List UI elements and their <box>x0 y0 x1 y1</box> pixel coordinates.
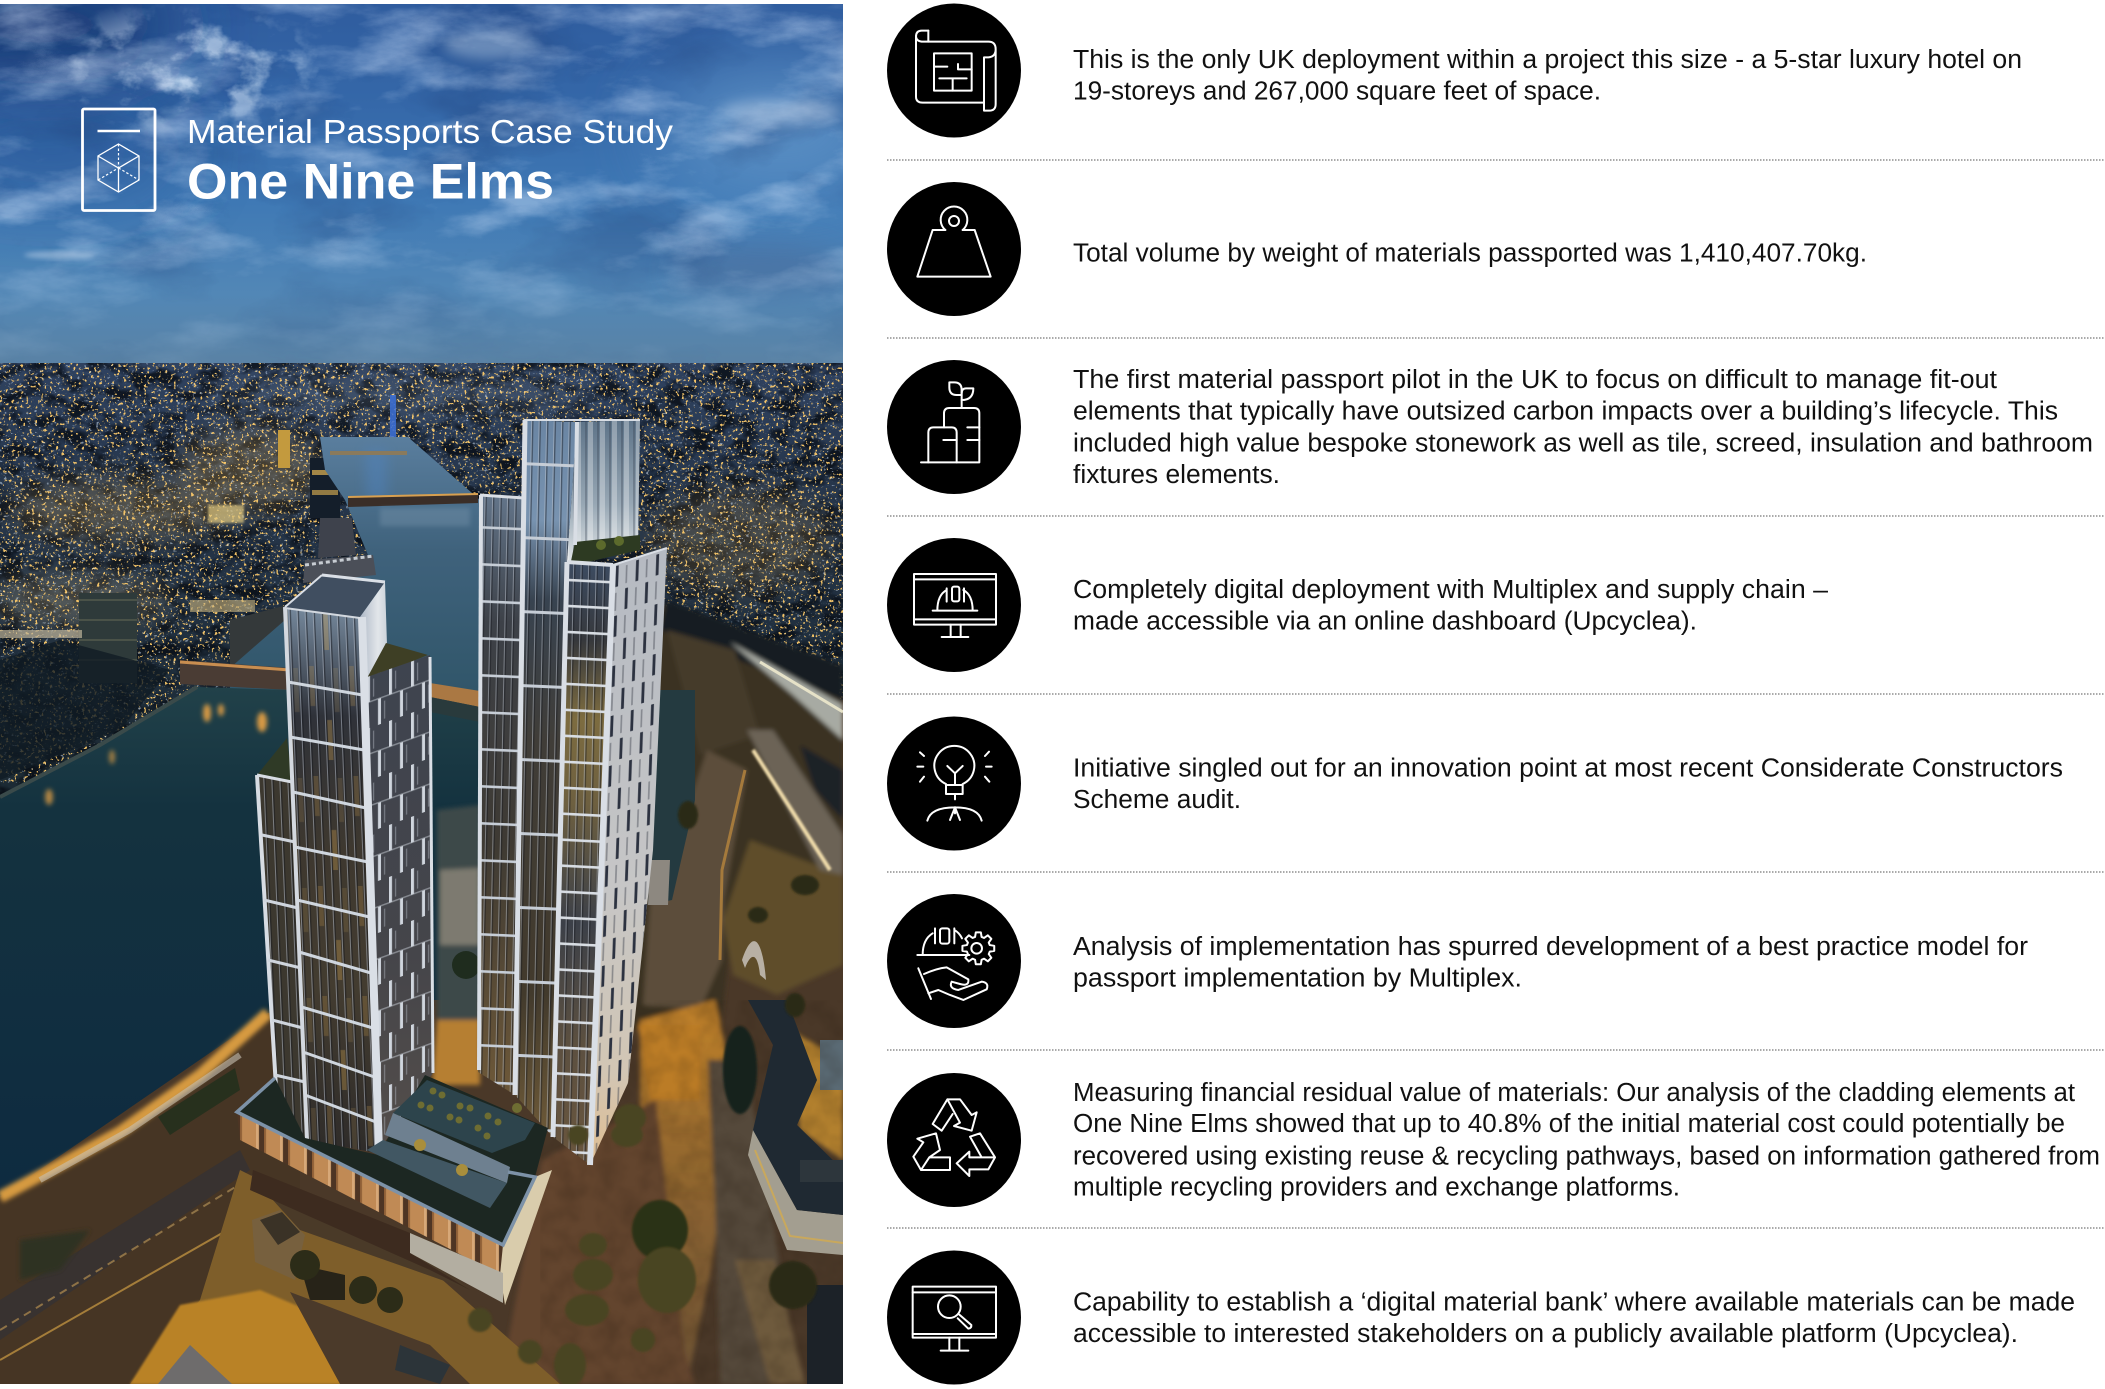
podium: lower terrace <box>367 1140 507 1208</box>
left tower: roof <box>285 575 385 617</box>
left tower: front face <box>285 607 377 1153</box>
podium: lit east glazing <box>500 1170 552 1305</box>
title: One Nine Elms <box>187 154 554 210</box>
right tower: central glazed core <box>515 420 577 1137</box>
podium: parapet rim <box>237 1078 535 1245</box>
row 4: text: made accessible via an online dashboard (Upcyclea). <box>1073 608 1697 636</box>
row 6: text: passport implementation by Multiplex. <box>1073 964 1522 992</box>
row 8: text: Capability to establish a ‘digital material bank’ where available materials can be made <box>1073 1288 2075 1316</box>
row 7: text <box>1073 1079 2100 1202</box>
right tower <box>478 420 667 1165</box>
photo: aerial view of One Nine Elms towers at dusk <box>0 0 900 1387</box>
podium: terrace trees <box>414 1088 522 1176</box>
row 5: text <box>1073 754 2063 814</box>
ground base layer <box>0 700 843 1384</box>
right tower: corner columns <box>479 420 667 1165</box>
podium: dark ground-level band <box>250 1170 470 1290</box>
sky with clouds <box>0 0 900 370</box>
left tower: terrace garden <box>366 643 428 680</box>
row 4: text <box>1073 576 1829 636</box>
distant city with lights <box>0 363 843 823</box>
row 5: text: Initiative singled out for an innovation point at most recent Considerate Constructors <box>1073 754 2063 782</box>
row 3: text: elements that typically have outsized carbon impacts over a building’s lifecycle. This <box>1073 398 2058 426</box>
right-hand district: roads, rail and parkland <box>432 600 843 1384</box>
left tower <box>257 575 433 1153</box>
row 5: light bulb icon <box>887 716 1021 850</box>
riverside rotunda tower <box>303 518 376 583</box>
riverside promenade and left road <box>0 1006 270 1361</box>
row 6: hard hat, gear and hand icon <box>887 894 1021 1028</box>
S-shaped office building <box>748 1000 843 1384</box>
row 3: text <box>1073 366 2093 489</box>
right tower: louvred crown <box>567 420 640 566</box>
podium: upper terrace <box>393 1080 535 1153</box>
left tower: corner columns <box>285 575 433 1153</box>
trees and plaza planting <box>468 801 819 1387</box>
row 3: building and sprout icon <box>887 360 1021 494</box>
row 3: text: The first material passport pilot in the UK to focus on difficult to manage fit-out <box>1073 366 1997 394</box>
row 7: text: Measuring financial residual value of materials: Our analysis of the cladding elements at <box>1073 1079 2075 1107</box>
row 1: blueprint icon <box>887 4 1021 138</box>
right tower: front face <box>553 562 613 1165</box>
podium: copper fin facade <box>237 1112 503 1275</box>
row 5: text: Scheme audit. <box>1073 786 1241 814</box>
podium with roof terraces <box>237 1075 552 1305</box>
foreshore and left bank <box>230 606 285 664</box>
podium: pale lower block <box>410 1233 503 1303</box>
row 6: text: Analysis of implementation has spurred development of a best practice model for <box>1073 933 2029 961</box>
right tower: west wing <box>478 495 524 1095</box>
row 7: text: One Nine Elms showed that up to 40.8% of the initial material cost could potentially be <box>1073 1110 2065 1138</box>
left tower: west wing and roof garden <box>257 738 307 1140</box>
podium: roof <box>237 1075 548 1245</box>
row 3: text: fixtures elements. <box>1073 461 1280 489</box>
row 1: text: This is the only UK deployment within a project this size - a 5-star luxury hotel on <box>1073 46 2022 74</box>
podium: screen wall <box>385 1113 510 1183</box>
subtitle: Material Passports Case Study <box>187 114 673 151</box>
row 1: text <box>1073 46 2022 106</box>
row 6: text <box>1073 933 2029 992</box>
row 7: text: multiple recycling providers and exchange platforms. <box>1073 1174 1680 1202</box>
lower river Thames <box>0 687 482 1197</box>
row 2: text: Total volume by weight of materials passported was 1,410,407.70kg. <box>1073 240 1867 268</box>
right tower: east fins face <box>590 548 667 1165</box>
row 8: text: accessible to interested stakeholders on a publicly available platform (Upcyclea). <box>1073 1320 2018 1348</box>
river bridges <box>180 660 480 722</box>
row 8: text <box>1073 1288 2075 1348</box>
row 4: text: Completely digital deployment with Multiplex and supply chain – <box>1073 576 1829 604</box>
forecourt and amber plaza <box>130 1170 560 1384</box>
passport cube icon <box>82 109 155 210</box>
left tower: white crown <box>360 582 387 680</box>
row 4: monitor with hard hat icon <box>887 538 1021 672</box>
row 1: text: 19-storeys and 267,000 square feet of space. <box>1073 78 1601 106</box>
row 3: text: included high value bespoke stonework as well as tile, screed, insulation and bathroom <box>1073 430 2093 458</box>
left tower: east fins face <box>367 655 433 1153</box>
row 8: monitor with magnifier icon <box>887 1250 1021 1384</box>
row 2: weight icon <box>887 182 1021 316</box>
row 7: recycling icon <box>887 1073 1021 1207</box>
row 7: text: recovered using existing reuse & recycling pathways, based on information gathered from <box>1073 1142 2100 1170</box>
upper river Thames <box>230 437 480 700</box>
